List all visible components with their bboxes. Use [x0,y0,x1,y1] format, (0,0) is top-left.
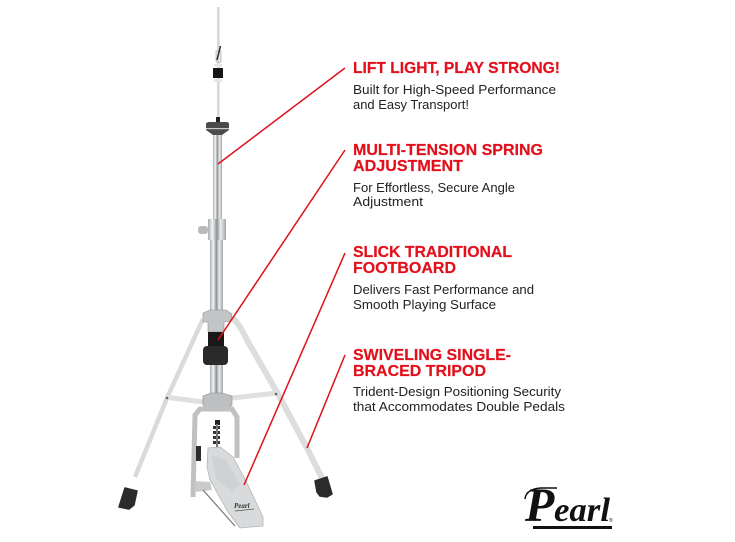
bottom cymbal seat [206,117,229,135]
callout line: tripod [307,355,345,448]
body: tripod [353,385,565,414]
callout line: spring adjustment [218,150,345,340]
body: spring adjustment [353,181,515,209]
body: lift light [353,83,556,112]
heading: tripod [353,347,511,380]
text block: spring adjustment [353,142,543,209]
heading: tripod: SWIVELING SINGLE- [353,347,511,364]
heading: lift light: LIFT LIGHT, PLAY STRONG! [353,60,560,77]
footboard: Pearl [234,502,250,510]
text block: tripod [353,347,565,414]
pedal frame [193,409,237,497]
black tension housing [208,332,224,347]
text block: lift light [353,60,560,112]
heading: spring adjustment [353,142,543,175]
lower leg bracket [203,393,232,410]
heading: footboard: SLICK TRADITIONAL [353,244,512,261]
tension side tab [196,446,201,461]
leg braces [165,393,277,402]
heel linkage [195,481,235,526]
upper leg bracket [203,310,232,332]
body: tripod: Trident-Design Positioning Security [353,385,562,399]
upper tube [213,135,222,220]
heading: footboard: FOOTBOARD [353,260,456,277]
heading: footboard [353,244,512,277]
callout line: lift light [218,68,345,164]
hi-hat stand product illustration [119,7,332,528]
body: footboard: Smooth Playing Surface [353,298,496,312]
body: lift light: Built for High-Speed Performance [353,83,556,97]
footboard [207,447,263,528]
right tripod leg [232,317,322,478]
height clamp and knob [198,219,226,240]
lower tube [210,240,223,393]
cymbal clutch [213,46,223,82]
left rubber foot [119,488,137,509]
body: lift light: and Easy Transport! [353,98,469,112]
spring [213,420,220,448]
Pearl logo: earl [554,492,611,529]
black tension nut [203,346,228,365]
top rod [217,7,220,118]
body: footboard: Delivers Fast Performance and [353,283,534,297]
heading: spring adjustment: ADJUSTMENT [353,158,463,175]
right rubber foot [315,477,332,497]
body: footboard [353,283,534,312]
Pearl logo [524,479,613,532]
Pearl logo: P [524,479,555,532]
callout line: footboard [244,253,345,485]
Pearl logo: ® [609,517,613,524]
body: spring adjustment: Adjustment [353,195,424,209]
heading: spring adjustment: MULTI-TENSION SPRING [353,142,543,159]
text block: footboard [353,244,534,312]
body: tripod: that Accommodates Double Pedals [353,400,565,414]
left tripod leg [135,319,203,477]
body: spring adjustment: For Effortless, Secure Angle [353,181,515,195]
heading: tripod: BRACED TRIPOD [353,363,486,380]
